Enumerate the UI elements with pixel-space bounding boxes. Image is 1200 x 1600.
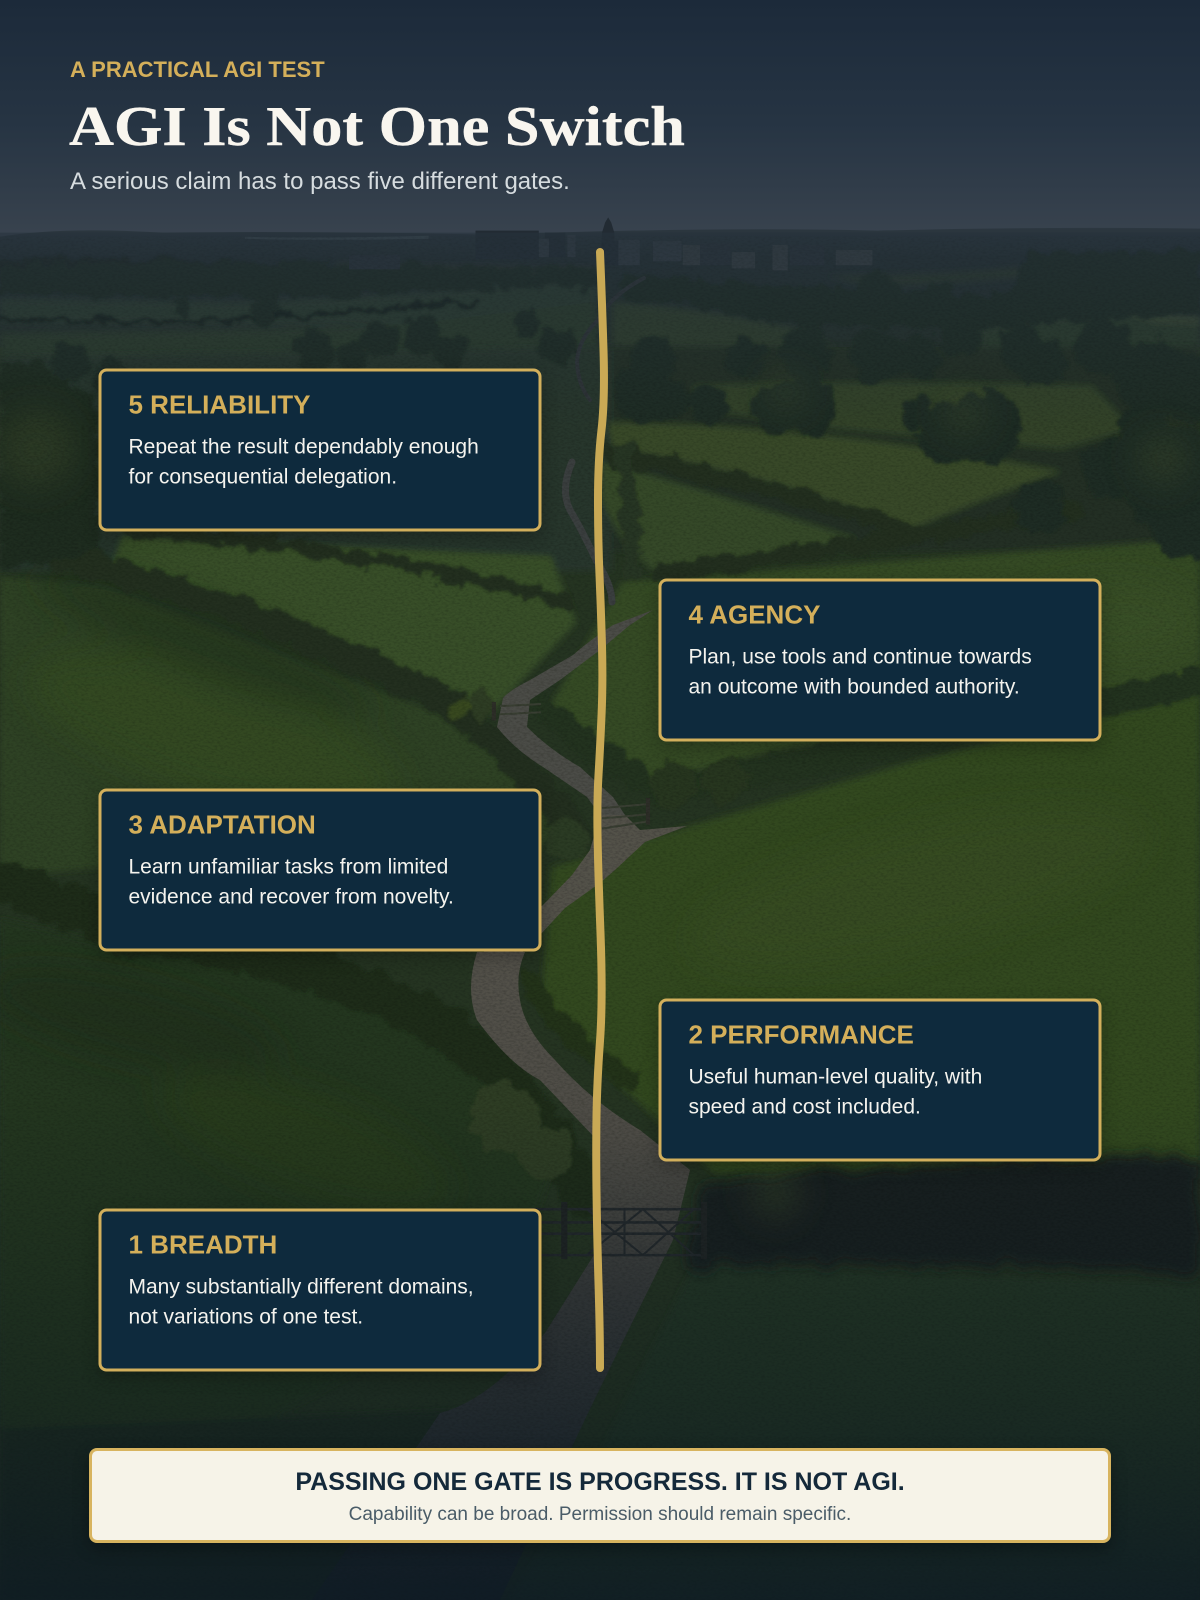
road: gravel bend below gate (480, 815, 687, 955)
road: middle stretch (497, 610, 653, 815)
panel: gate 2 performance (658, 998, 1102, 1162)
distant hills and woodland (0, 228, 1200, 347)
text: breadth description: not variations of one test. (128, 1306, 363, 1328)
title: AGI Is Not One Switch (69, 96, 685, 158)
main fields (0, 539, 1200, 1600)
heading: 3 adaptation: 3 ADAPTATION (128, 810, 316, 840)
dark vignette at foot (0, 1102, 1200, 1600)
text: performance description (688, 1066, 982, 1118)
text: agency description (688, 646, 1032, 698)
banner subtext: Capability can be broad. Permission should remain specific. (349, 1504, 851, 1525)
subtitle: A serious claim has to pass five different gates. (70, 168, 570, 195)
text: reliability description: Repeat the result dependably enough (128, 436, 479, 458)
panel: gate 1 breadth (98, 1208, 542, 1372)
text: reliability description: for consequential delegation. (128, 466, 397, 488)
road: narrow upper lanes (565, 278, 644, 602)
field light patches (0, 542, 1200, 1243)
text: performance description: Useful human-level quality, with (688, 1066, 982, 1088)
far field bands (0, 263, 1200, 369)
panel: gate 4 agency (658, 578, 1102, 742)
text: breadth description: Many substantially different domains, (128, 1276, 474, 1298)
hedgerows (0, 264, 1200, 1194)
heading: 2 performance: 2 PERFORMANCE (688, 1020, 914, 1050)
mid-distance meadows (0, 347, 1200, 714)
roadside bushes (451, 692, 747, 1180)
dark hedge across foreground (684, 1155, 1200, 1276)
road (312, 278, 690, 1600)
road: lower gravel stretch (312, 952, 690, 1600)
heading: 4 agency: 4 AGENCY (688, 600, 820, 630)
panel: gate 3 adaptation (98, 788, 542, 952)
tree highlights (0, 370, 1192, 1220)
sky (0, 0, 1200, 245)
text: adaptation description: Learn unfamiliar tasks from limited (128, 856, 448, 878)
panel: conclusion banner (89, 1448, 1111, 1543)
panel: gate 5 reliability (98, 368, 542, 532)
eyebrow: A PRACTICAL AGI TEST (70, 57, 325, 82)
text: agency description: an outcome with bounded authority. (688, 676, 1020, 698)
heading: 1 breadth: 1 BREADTH (128, 1230, 277, 1260)
text: adaptation description: evidence and recover from novelty. (128, 886, 454, 908)
town on the horizon (349, 217, 872, 270)
heading: 5 reliability: 5 RELIABILITY (128, 390, 311, 420)
text: reliability description (128, 436, 479, 488)
text: breadth description (128, 1276, 474, 1328)
text: adaptation description (128, 856, 454, 908)
dusk haze over far land (0, 233, 1200, 427)
text: agency description: Plan, use tools and continue towards (688, 646, 1032, 668)
trees (0, 251, 1200, 571)
banner heading: PASSING ONE GATE IS PROGRESS. IT IS NOT AGI. (295, 1468, 905, 1496)
text: performance description: speed and cost included. (688, 1096, 921, 1118)
farm gates (494, 702, 704, 1259)
